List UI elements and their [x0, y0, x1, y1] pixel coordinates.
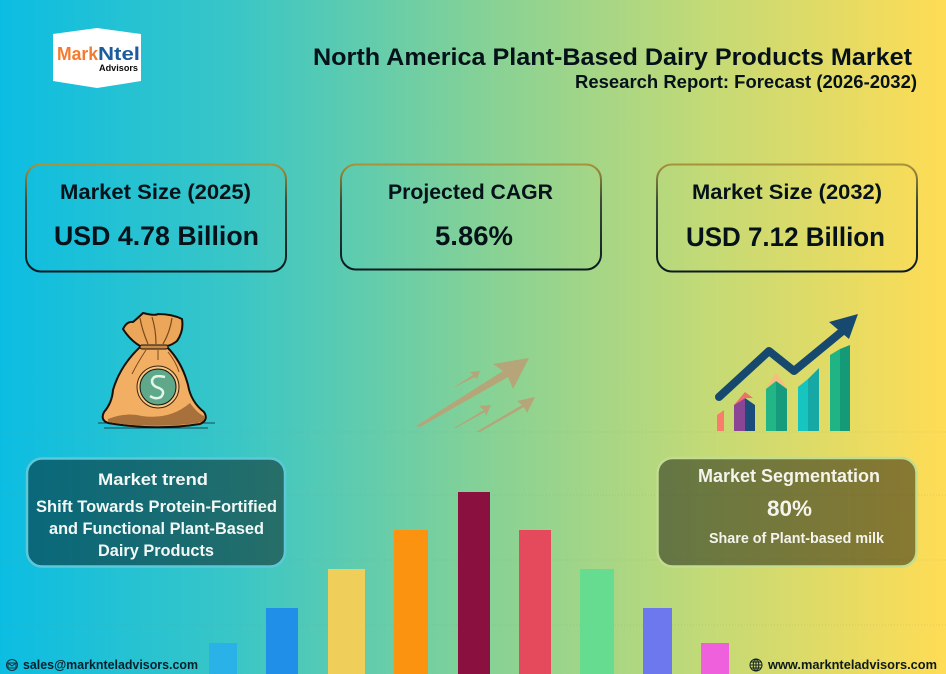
panel: market segmentation	[658, 458, 916, 566]
panel: market size 2032	[657, 164, 917, 272]
panel: market segmentation: Market Segmentation	[698, 466, 880, 486]
panel: market size 2025: Market Size (2025)	[60, 181, 251, 204]
panel: projected CAGR	[341, 164, 601, 270]
icon: faded arrows	[416, 358, 535, 432]
panel: market trend: Dairy Products	[98, 542, 214, 560]
panel: market size 2025: USD 4.78 Billion	[54, 221, 259, 251]
footer: email: sales@marknteladvisors.com	[23, 657, 198, 672]
panel: market trend: Market trend	[98, 470, 208, 489]
title	[313, 44, 917, 92]
panel: market size 2025	[26, 164, 286, 272]
panel: market trend: and Functional Plant-Based	[49, 520, 264, 538]
panel: market segmentation: Share of Plant-based milk	[709, 531, 885, 547]
panel: market trend	[27, 458, 285, 566]
logo: Advisors	[99, 63, 138, 73]
title: Research Report: Forecast (2026-2032)	[575, 72, 917, 92]
logo	[53, 28, 141, 88]
panel: market size 2032: USD 7.12 Billion	[686, 222, 885, 252]
logo: Mark	[57, 44, 99, 64]
icon: money bag	[98, 313, 215, 428]
bar chart	[209, 492, 729, 674]
title: North America Plant-Based Dairy Products Market	[313, 44, 912, 71]
logo: Ntel	[98, 44, 140, 64]
footer: website: www.marknteladvisors.com	[767, 657, 937, 672]
panel: projected CAGR: Projected CAGR	[388, 181, 553, 204]
panel: market size 2032: Market Size (2032)	[692, 181, 882, 204]
panel: projected CAGR: 5.86%	[435, 221, 513, 251]
icon: growth bar chart	[717, 314, 858, 431]
panel: market trend: Shift Towards Protein-Fortified	[36, 498, 277, 516]
panel: market segmentation: 80%	[767, 496, 812, 521]
